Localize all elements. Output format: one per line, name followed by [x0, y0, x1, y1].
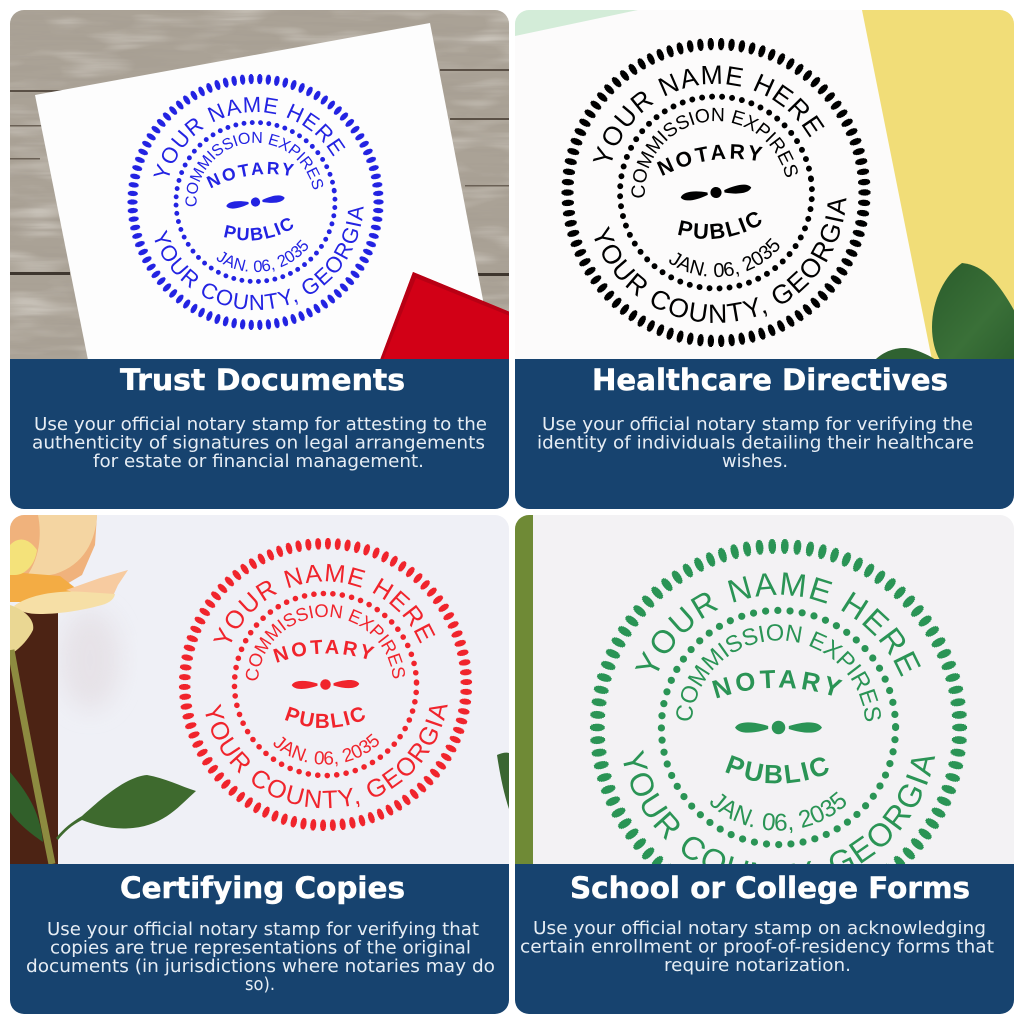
stamp: red notary seal: YOUR COUNTY, GEORGIA — [206, 704, 448, 808]
photo: red stamp box — [380, 272, 510, 360]
body text: Use your official notary stamp on acknowledging — [533, 919, 986, 939]
photo: white paper sheet — [515, 515, 1015, 865]
stamp: black notary seal: COMMISSION EXPIRES — [631, 108, 798, 198]
photo: wood table background — [10, 10, 510, 360]
photo: white paper sheet — [515, 10, 1015, 360]
panel: trust documents — [10, 10, 509, 509]
body text: Use your official notary stamp for verifying that — [47, 920, 479, 940]
stamp: blue notary seal: YOUR COUNTY, GEORGIA — [154, 206, 364, 310]
stamp: green notary seal: JAN. 06, 2035 — [710, 792, 846, 834]
body text: copies are true representations of the original — [50, 938, 471, 958]
photo: green fabric strip — [515, 515, 533, 865]
body text — [538, 416, 973, 468]
panel: school or college forms — [515, 515, 1014, 1014]
body text: Use your official notary stamp for attesting to the — [34, 415, 487, 435]
photo: green leaves — [10, 753, 510, 842]
body text — [32, 415, 487, 472]
photo: white paper sheet — [35, 23, 486, 360]
caption band — [10, 359, 510, 510]
body text: identity of individuals detailing their healthcare — [537, 434, 974, 454]
photo: flower stem — [11, 650, 52, 864]
stamp: blue notary seal — [128, 74, 384, 330]
photo: dark wood strip — [10, 610, 58, 865]
body text: certain enrollment or proof-of-residency forms that — [520, 938, 994, 958]
caption band — [515, 359, 1015, 510]
body text: documents (in jurisdictions where notaries may do — [26, 957, 495, 977]
stamp: red notary seal — [178, 538, 472, 831]
stamp: red notary seal: YOUR NAME HERE — [213, 564, 436, 644]
stamp: red notary seal: COMMISSION EXPIRES — [246, 604, 405, 680]
stamp: green notary seal: PUBLIC — [725, 755, 829, 784]
stamp: blue notary seal: COMMISSION EXPIRES — [185, 132, 324, 206]
stamp: black notary seal: YOUR NAME HERE — [592, 66, 825, 162]
stamp: black notary seal: PUBLIC — [678, 212, 762, 240]
panel: healthcare directives — [515, 10, 1014, 509]
stamp: blue notary seal: PUBLIC — [224, 218, 294, 241]
photo: white paper sheet — [10, 515, 510, 865]
stamp: red notary seal: PUBLIC — [285, 706, 365, 728]
stamp: black notary seal: NOTARY — [656, 144, 763, 176]
photo: soft shadow under flower — [63, 615, 117, 704]
body text: require notarization. — [664, 956, 851, 976]
photo: yellow card — [862, 10, 1015, 360]
heading: Trust Documents — [120, 363, 405, 397]
stamp: blue notary seal: YOUR NAME HERE — [153, 96, 346, 176]
photo: pale green corner — [515, 10, 638, 36]
heading: School or College Forms — [570, 871, 970, 905]
body text: for estate or financial management. — [93, 452, 424, 472]
photo: green leaves — [875, 263, 1015, 360]
body text — [26, 920, 495, 995]
stamp: black notary seal — [562, 38, 870, 347]
heading: Healthcare Directives — [592, 363, 948, 397]
stamp: red notary seal: NOTARY — [273, 640, 375, 663]
photo: peach flower — [10, 515, 128, 652]
body text: authenticity of signatures on legal arrangements — [32, 434, 485, 454]
body text: Use your official notary stamp for verifying the — [542, 415, 973, 435]
stamp: green notary seal: COMMISSION EXPIRES — [676, 624, 881, 722]
stamp: blue notary seal: JAN. 06, 2035 — [216, 240, 308, 272]
panel: certifying copies — [10, 515, 509, 1014]
caption band — [515, 864, 1015, 1015]
caption band — [10, 864, 510, 1015]
stamp: green notary seal: NOTARY — [712, 670, 842, 698]
body text: wishes. — [722, 452, 788, 472]
stamp: black notary seal: JAN. 06, 2035 — [669, 238, 780, 278]
stamp: green notary seal: YOUR NAME HERE — [634, 572, 921, 677]
stamp: black notary seal: YOUR COUNTY, GEORGIA — [594, 198, 846, 323]
stamp: green notary seal: YOUR COUNTY, GEORGIA — [624, 750, 936, 864]
stamp: red notary seal: JAN. 06, 2035 — [274, 734, 379, 766]
heading: Certifying Copies — [120, 871, 405, 905]
body text: so). — [245, 975, 275, 995]
stamp: green notary seal — [590, 539, 968, 864]
stamp: blue notary seal: NOTARY — [206, 162, 294, 188]
body text — [520, 919, 994, 976]
